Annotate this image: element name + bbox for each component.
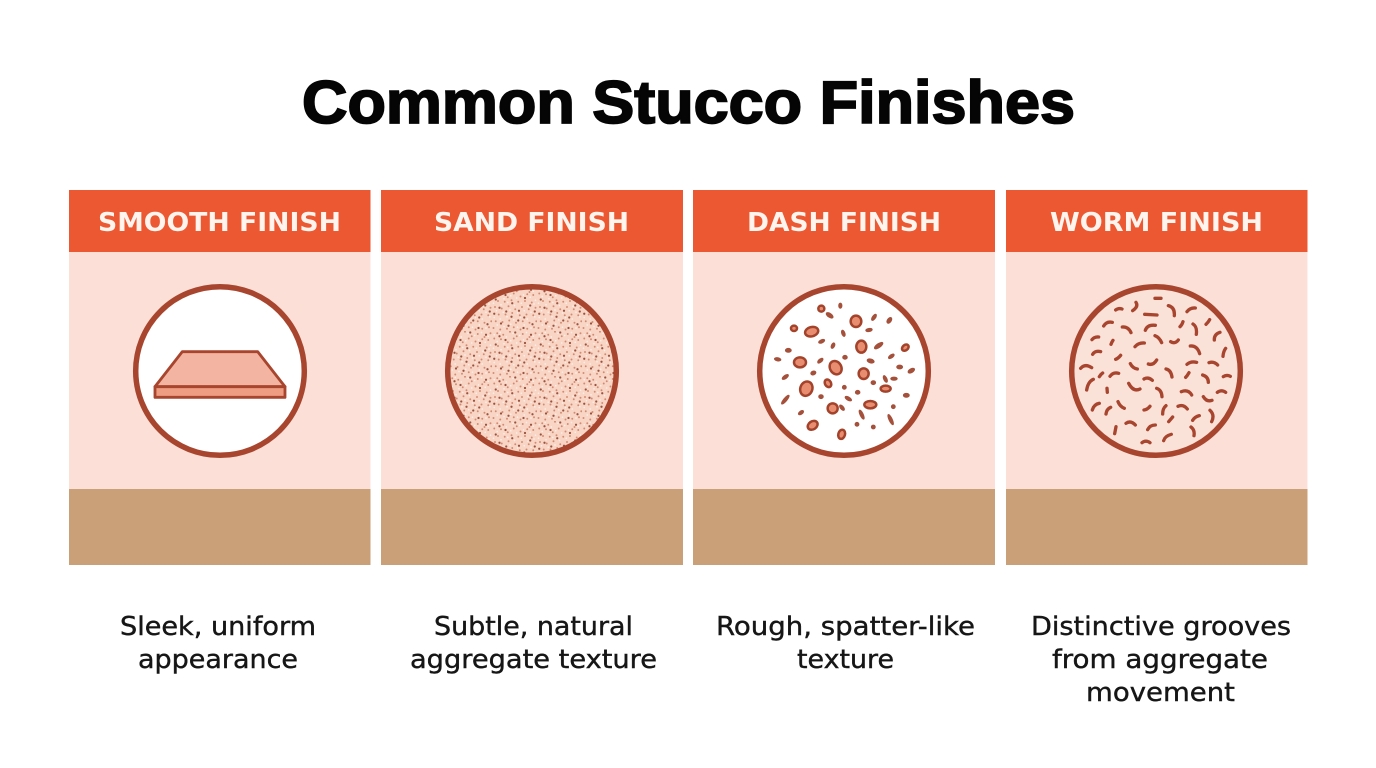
sand finish description: Subtle, natural (434, 612, 633, 642)
dash finish description (716, 612, 975, 675)
icon: smooth slab in circle (136, 287, 304, 455)
dash finish header bar (693, 190, 995, 252)
icon: dash spatter in circle (760, 287, 928, 455)
smooth finish description: appearance (138, 645, 298, 675)
panel: smooth finish (69, 190, 370, 675)
sand finish header bar: SAND FINISH (434, 208, 629, 238)
worm finish description (1031, 612, 1291, 708)
sand finish description: aggregate texture (410, 645, 657, 675)
smooth finish header bar (69, 190, 370, 252)
dash finish body (693, 252, 995, 489)
worm finish description: movement (1086, 678, 1235, 708)
smooth finish body (69, 252, 370, 489)
worm finish description: Distinctive grooves (1031, 612, 1291, 642)
worm finish description: from aggregate (1052, 645, 1268, 675)
title: Common Stucco Finishes (302, 69, 1075, 136)
sand finish swatch band (381, 489, 683, 565)
icon: worm grooves in circle (1072, 287, 1240, 455)
worm finish body (1006, 252, 1308, 489)
worm finish header bar (1006, 190, 1308, 252)
panel: sand finish (381, 190, 683, 675)
smooth finish header bar: SMOOTH FINISH (98, 208, 341, 238)
worm finish header bar: WORM FINISH (1050, 208, 1263, 238)
panel: dash finish (693, 190, 995, 675)
dash finish header bar: DASH FINISH (747, 208, 941, 238)
dash finish swatch band (693, 489, 995, 565)
dash finish description: Rough, spatter-like (716, 612, 975, 642)
smooth finish description (120, 612, 316, 675)
sand finish body (381, 252, 683, 489)
sand finish description (410, 612, 657, 675)
smooth finish swatch band (69, 489, 370, 565)
icon: sand speckle in circle (447, 286, 617, 456)
sand finish header bar (381, 190, 683, 252)
smooth finish description: Sleek, uniform (120, 612, 316, 642)
dash finish description: texture (797, 645, 894, 675)
worm finish swatch band (1006, 489, 1308, 565)
panel: worm finish (1006, 190, 1308, 708)
